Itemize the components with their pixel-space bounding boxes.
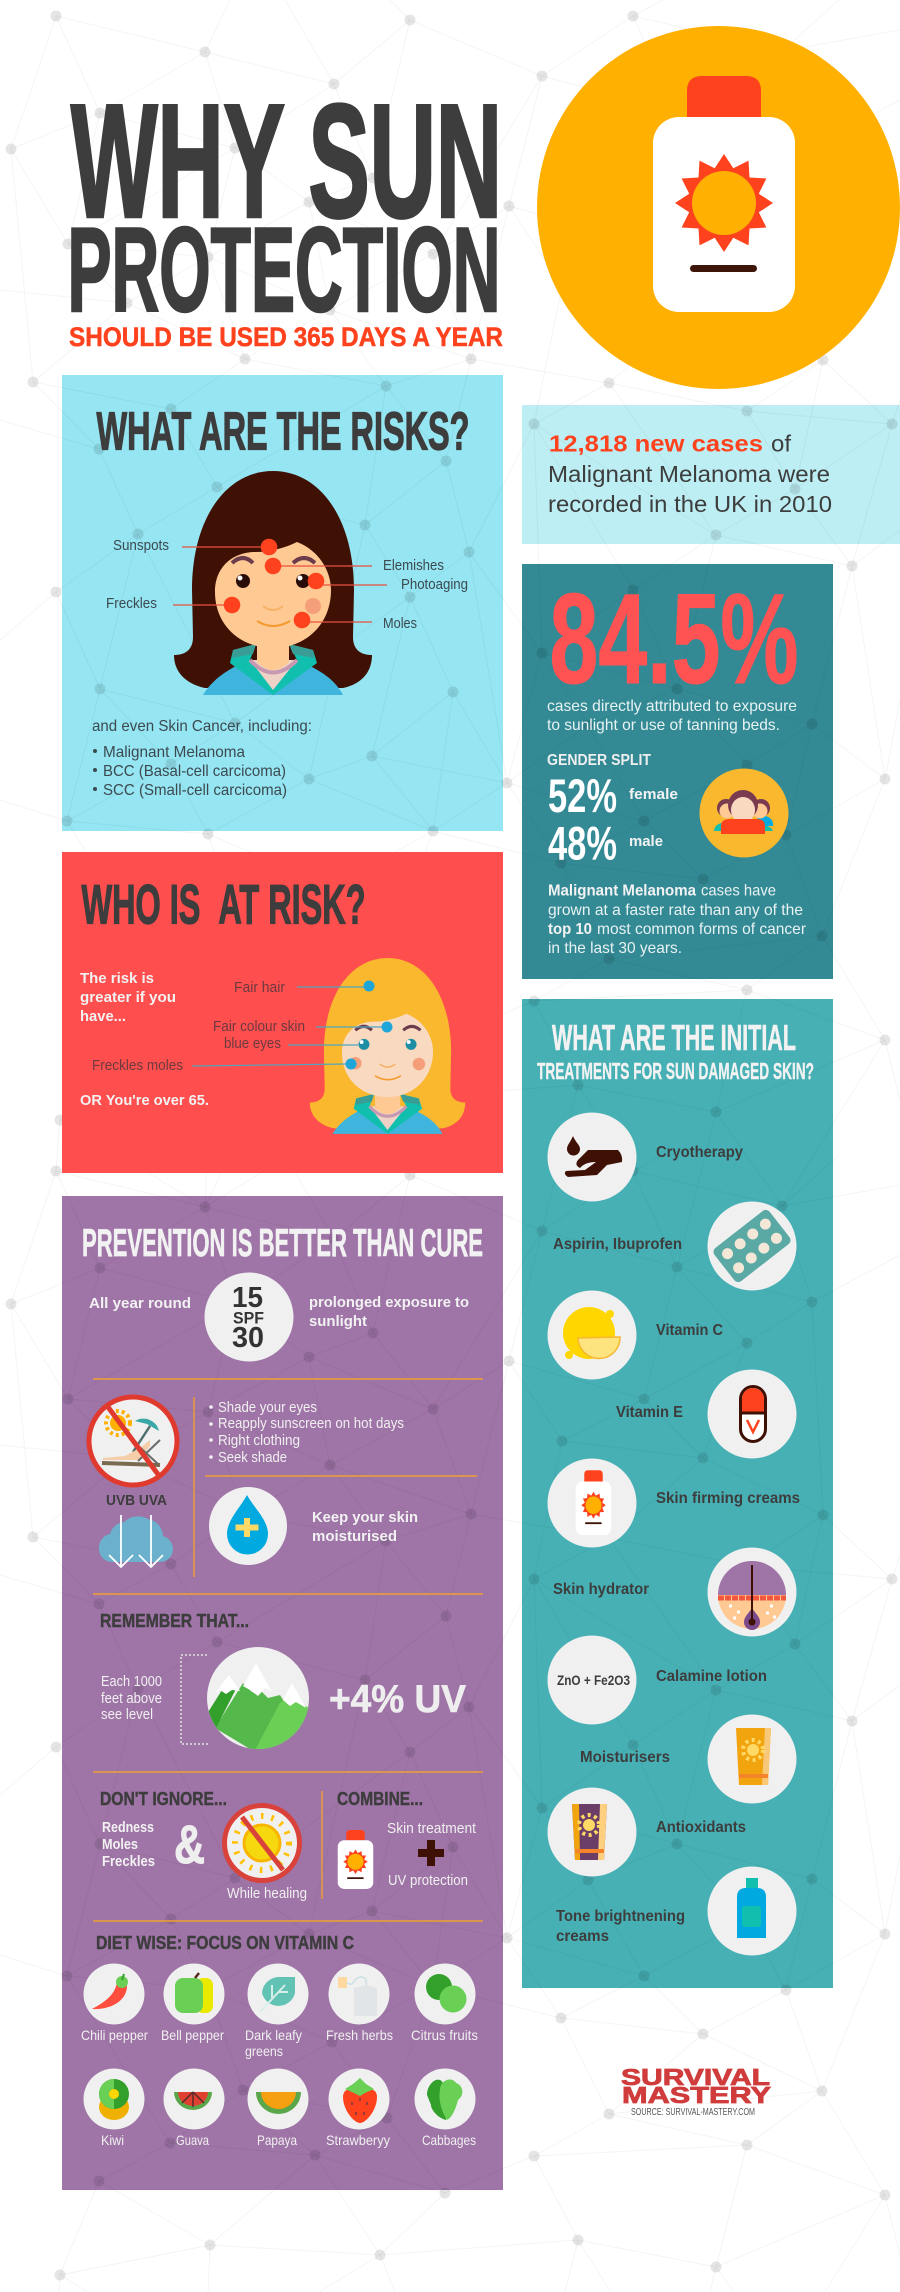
label: vitamin E: Vitamin E: [616, 1404, 683, 1421]
subheading: gender split: GENDER SPLIT: [547, 752, 651, 769]
text: melanoma growth: grown at a faster rate than any of the: [548, 902, 803, 919]
food labels row 1: greens: [245, 2043, 283, 2059]
subheading: don't ignore: DON'T IGNORE...: [100, 1789, 227, 1809]
food icon: guava: [164, 2068, 224, 2130]
label: tone brightening creams: creams: [556, 1928, 609, 1945]
title line 1: WHY SUN: [71, 72, 502, 252]
icon: sunscreen bottle in orange circle: [537, 26, 900, 389]
text: symptoms list: [102, 1819, 155, 1870]
label: aspirin ibuprofen: Aspirin, Ibuprofen: [553, 1236, 682, 1253]
ampersand: &: [174, 1815, 205, 1875]
text: melanoma growth: in the last 30 years.: [548, 940, 682, 957]
text: exposure attribution: cases directly attributed to exposure: [547, 698, 797, 715]
food labels row 2: Strawberyy: [326, 2132, 390, 2148]
marker labels: Elemishes: [383, 558, 444, 574]
label: skin firming creams: Skin firming creams: [656, 1490, 800, 1507]
stat: female: 52%: [548, 769, 617, 822]
text: melanoma growth: most common forms of cancer: [597, 921, 807, 938]
text: symptoms list: Freckles: [102, 1853, 155, 1870]
logo: survival mastery: SOURCE: SURVIVAL-MASTERY.COM: [631, 2107, 755, 2118]
icon: chemical formula: [548, 1636, 636, 1724]
panel: initial treatments: [522, 999, 833, 1988]
text: keep your skin moisturised: moisturised: [312, 1528, 397, 1545]
food labels row 2: Kiwi: [101, 2132, 124, 2148]
icon: small sunscreen bottle: [338, 1830, 373, 1889]
marker labels: Photoaging: [401, 577, 468, 593]
callout text: [548, 430, 832, 517]
icon: water drop with plus: [209, 1487, 287, 1565]
text: the risk is greater: [80, 970, 176, 1025]
food icon: papaya: [248, 2068, 308, 2130]
heading: treatments: [537, 1017, 814, 1084]
icon: SPF badge: [204, 1272, 294, 1362]
icon: orange cream tube: [708, 1714, 796, 1804]
icon: hair follicle: [708, 1548, 796, 1636]
logo: survival mastery: SURVIVAL: [621, 2064, 770, 2090]
icon: SPF badge: 15: [232, 1282, 263, 1314]
icon: chemical formula: ZnO + Fe2O3: [557, 1672, 630, 1688]
food labels row 2: [101, 2132, 476, 2148]
label: tone brightening creams: [556, 1908, 685, 1945]
text: prevention tips list: Reapply sunscreen on hot days: [218, 1416, 404, 1432]
heading: what are the risks: WHAT ARE THE RISKS?: [96, 402, 470, 462]
text: the risk is greater: greater if you: [80, 989, 176, 1006]
text: all year round: All year round: [89, 1295, 191, 1312]
text: prevention tips list: Shade your eyes: [218, 1400, 317, 1416]
title line 2: PROTECTION: [68, 203, 500, 337]
illustration: blonde woman with markers: [192, 958, 465, 1134]
illustration: brunette woman with skin markers: [173, 471, 387, 695]
text: over 65: OR You're over 65.: [80, 1092, 209, 1109]
panel: what are the risks: [62, 375, 503, 831]
text: the risk is greater: The risk is: [80, 970, 154, 987]
text: exposure attribution: to sunlight or use of tanning beds.: [547, 717, 780, 734]
food icon: citrus fruits: [414, 1964, 476, 2024]
text: prevention tips list: Seek shade: [218, 1450, 287, 1466]
icon: lemon: [548, 1290, 636, 1380]
text: melanoma growth: Malignant Melanoma: [548, 882, 696, 900]
text: skin treatment: Skin treatment: [387, 1821, 476, 1837]
food labels row 1: Citrus fruits: [411, 2027, 478, 2043]
bracket: altitude: [181, 1655, 210, 1744]
marker labels: [106, 538, 468, 632]
text: prolonged exposure: sunlight: [309, 1313, 367, 1330]
marker labels: Fair hair: [234, 980, 285, 996]
text: prevention tips list: Right clothing: [218, 1433, 300, 1449]
title block: [68, 72, 503, 352]
callout text: recorded in the UK in 2010: [548, 491, 832, 517]
food icon: strawberry: [328, 2068, 390, 2130]
panel background: statistics: [522, 564, 833, 979]
marker labels: Moles: [383, 616, 417, 632]
panel background: new cases callout: [522, 405, 900, 544]
text: each 1000 feet: [101, 1674, 162, 1723]
food labels row 1: Dark leafy: [245, 2027, 302, 2043]
heading: prevention: PREVENTION IS BETTER THAN CURE: [82, 1222, 483, 1265]
text: while healing: While healing: [227, 1886, 307, 1902]
logo: survival mastery: [621, 2064, 771, 2118]
food labels row 2: Cabbages: [422, 2132, 476, 2148]
callout highlight number: 12,818 new cases: [549, 430, 763, 456]
text: exposure attribution: [547, 698, 797, 734]
food icon: kiwi: [84, 2068, 144, 2130]
icon: no sun sign: [224, 1806, 300, 1880]
text: prevention tips list: [209, 1400, 404, 1466]
marker labels: blue eyes: [224, 1036, 281, 1052]
text: keep your skin moisturised: [312, 1509, 418, 1545]
food icon: leafy greens: [248, 1964, 308, 2024]
icon: SPF badge: SPF: [233, 1308, 264, 1328]
label: tone brightening creams: Tone brightnening: [556, 1908, 685, 1925]
text: each 1000 feet: Each 1000: [101, 1674, 162, 1690]
icon: capsule: [708, 1370, 796, 1458]
food labels row 1: [81, 2027, 478, 2059]
callout text: Malignant Melanoma were: [548, 461, 830, 487]
label: moisturisers: Moisturisers: [580, 1749, 670, 1766]
icon: SPF badge: 30: [232, 1322, 264, 1354]
label: UVB UVA: UVB UVA: [106, 1492, 167, 1509]
food icon: cabbage: [414, 2068, 476, 2130]
text: the risk is greater: have...: [80, 1008, 126, 1025]
text: skin cancer list: [92, 718, 312, 799]
marker labels: Sunspots: [113, 538, 169, 554]
text: UV protection: UV protection: [388, 1873, 468, 1889]
text: skin cancer list: SCC (Small-cell carcicoma): [103, 782, 287, 799]
panel: statistics: [522, 564, 833, 979]
text: skin cancer list: BCC (Basal-cell carcicoma): [103, 763, 286, 780]
logo: survival mastery: MASTERY: [622, 2082, 771, 2108]
food labels row 2: Papaya: [257, 2132, 297, 2148]
text: prolonged exposure: [309, 1294, 469, 1330]
text: each 1000 feet: see level: [101, 1707, 153, 1723]
icon: cloud with UV arrows: [99, 1515, 173, 1567]
stat: male: male: [629, 833, 663, 850]
panel: who is at risk: [62, 852, 503, 1173]
text: skin cancer list: and even Skin Cancer, including:: [92, 718, 312, 735]
food icon: chili pepper: [84, 1964, 144, 2024]
label: skin hydrator: Skin hydrator: [553, 1581, 649, 1598]
text: melanoma growth: [548, 882, 807, 957]
food labels row 2: Guava: [176, 2132, 209, 2148]
subheading: combine: COMBINE...: [337, 1789, 423, 1809]
marker labels: Freckles: [106, 596, 157, 612]
text: symptoms list: Moles: [102, 1836, 138, 1853]
icon: purple cream tube: [548, 1788, 636, 1876]
label: cryotherapy: Cryotherapy: [656, 1144, 743, 1161]
panel background: prevention: [62, 1196, 503, 2190]
stat: female: female: [629, 786, 678, 803]
label: antioxidants: Antioxidants: [656, 1819, 746, 1836]
text: melanoma growth: top 10: [548, 921, 592, 938]
text: prolonged exposure: prolonged exposure to: [309, 1294, 469, 1311]
food labels row 1: Chili pepper: [81, 2027, 148, 2043]
icon: blue bottle: [708, 1866, 796, 1956]
icon: cryotherapy hand and drop: [548, 1112, 636, 1202]
panel: new cases callout: [522, 405, 900, 544]
label: vitamin C: Vitamin C: [656, 1322, 723, 1339]
marker labels: [92, 980, 305, 1074]
food icon: fresh herbs tea bag: [328, 1964, 390, 2024]
icon: plus: [418, 1840, 444, 1866]
marker labels: Freckles moles: [92, 1058, 183, 1074]
callout text: of: [771, 430, 792, 456]
icon: group of people: [700, 768, 788, 858]
food icon: bell pepper: [164, 1964, 224, 2024]
food labels row 1: Fresh herbs: [326, 2027, 393, 2043]
panel: prevention is better than cure: [82, 1228, 483, 2148]
text: symptoms list: Redness: [102, 1819, 154, 1836]
text: melanoma growth: cases have: [701, 882, 776, 900]
icon: no sunbathing sign: [89, 1397, 177, 1485]
icon: pill blister: [708, 1202, 796, 1290]
subheading: diet wise: DIET WISE: FOCUS ON VITAMIN C: [96, 1933, 354, 1953]
text: skin cancer list: Malignant Melanoma: [103, 744, 245, 761]
stat: plus 4 percent UV: +4% UV: [329, 1678, 466, 1721]
food labels row 1: Bell pepper: [161, 2027, 224, 2043]
heading: who is at risk: WHO IS AT RISK?: [82, 872, 366, 936]
subheading: remember that: REMEMBER THAT...: [100, 1611, 249, 1631]
marker labels: Fair colour skin: [213, 1019, 305, 1035]
panel background: treatments: [522, 999, 833, 1988]
text: each 1000 feet: feet above: [101, 1691, 162, 1707]
icon: sunscreen bottle: [548, 1458, 636, 1548]
stat: male: 48%: [548, 816, 617, 870]
text: keep your skin moisturised: Keep your skin: [312, 1509, 418, 1526]
panel background: what are the risks: [62, 375, 503, 831]
icon: mountains: [205, 1647, 312, 1752]
label: calamine lotion: Calamine lotion: [656, 1668, 767, 1685]
subtitle: SHOULD BE USED 365 DAYS A YEAR: [69, 322, 503, 352]
